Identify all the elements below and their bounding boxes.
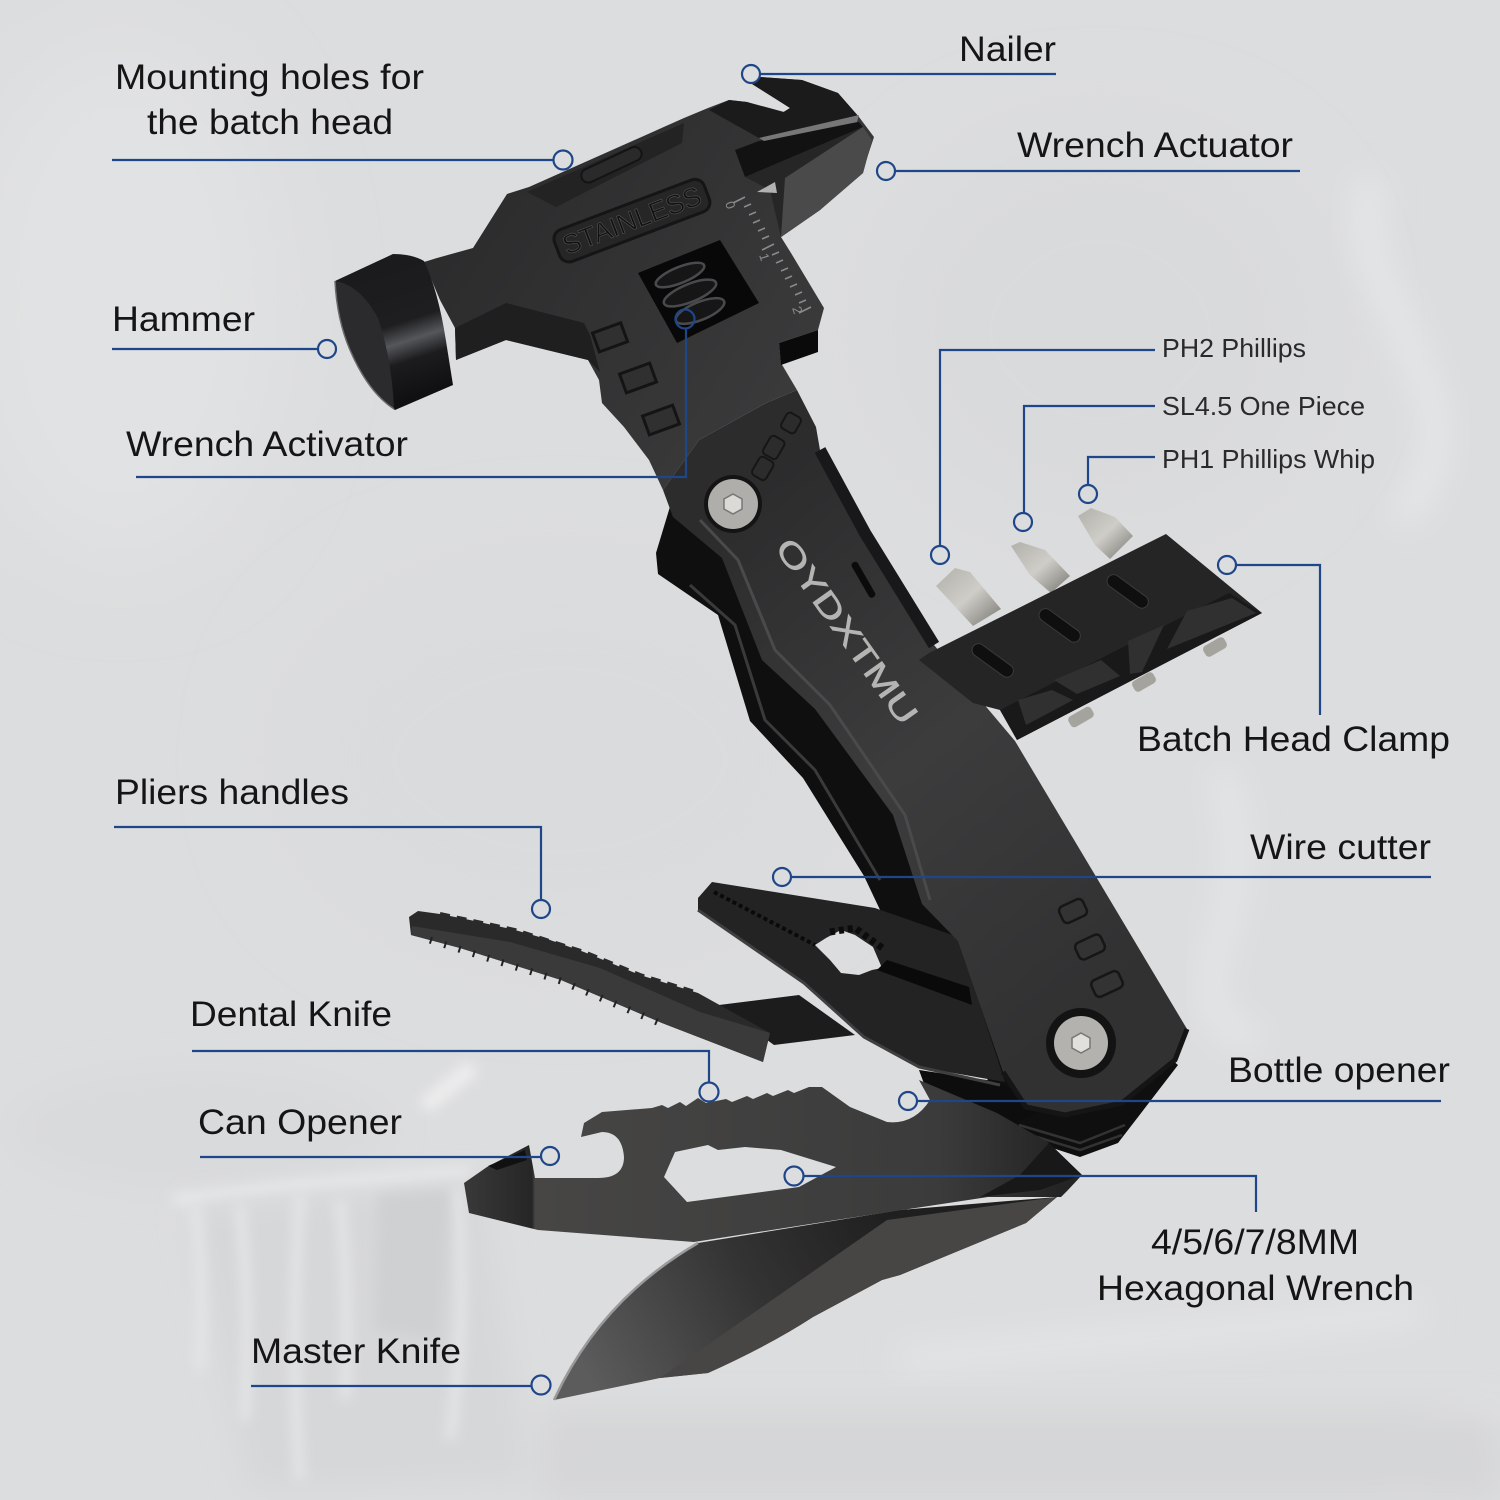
brand name on handle: OYDXTMU	[768, 531, 925, 731]
screw top	[704, 475, 762, 533]
handle top grip dots	[751, 411, 802, 482]
hammer face	[335, 254, 453, 410]
movable jaw	[745, 127, 872, 237]
phillips bit PH1	[1078, 508, 1133, 559]
leader: mounting holes	[112, 58, 572, 170]
leader: pliers handles: Pliers handles	[115, 773, 349, 812]
leader: hexagonal wrench: Hexagonal Wrench	[1097, 1269, 1414, 1308]
leader: PH1 Phillips Whip: PH1 Phillips Whip	[1162, 444, 1375, 474]
multi-blade: can opener, bottle opener, hex wrench	[464, 1080, 1082, 1242]
leader: wire cutter	[773, 828, 1431, 886]
leader: bottle opener: Bottle opener	[1228, 1051, 1450, 1090]
leader: batch head clamp	[1137, 556, 1450, 759]
leader: PH1 Phillips Whip	[1079, 444, 1375, 503]
leader: bottle opener	[899, 1051, 1450, 1110]
phillips bit PH2	[1011, 542, 1070, 593]
flat bit SL4.5	[936, 568, 1001, 626]
leader: wire cutter: Wire cutter	[1250, 828, 1431, 867]
ruler scale	[733, 197, 811, 313]
multitool	[335, 77, 1262, 1400]
master knife blade	[554, 1197, 1057, 1400]
leader: mounting holes: the batch head	[147, 103, 393, 142]
clamp body	[919, 534, 1262, 740]
screw bottom	[1046, 1008, 1116, 1078]
bit clamp with bits	[919, 508, 1262, 740]
leader: master knife: Master Knife	[251, 1332, 461, 1371]
ruler numerals	[722, 199, 806, 316]
top recessed panel	[527, 123, 684, 207]
leader: hexagonal wrench: 4/5/6/7/8MM	[1151, 1223, 1359, 1262]
leader: hexagonal wrench	[784, 1166, 1414, 1308]
leader: nailer	[742, 30, 1056, 83]
stainless plate: STAINLESS	[558, 181, 706, 260]
ruler numerals: 1	[756, 251, 773, 263]
leader: wrench activator: Wrench Activator	[126, 425, 408, 464]
leader: SL4.5 One Piece	[1014, 391, 1365, 531]
leader: PH2 Phillips: PH2 Phillips	[1162, 333, 1306, 363]
main handle	[663, 390, 1187, 1115]
leader: PH2 Phillips	[931, 333, 1306, 564]
clamp side facets	[1018, 598, 1256, 725]
leader: master knife	[251, 1332, 550, 1394]
jaw slot	[779, 330, 818, 365]
ruler numerals: 0	[722, 199, 739, 211]
leader: wrench actuator	[877, 126, 1300, 180]
clamp slots	[969, 572, 1151, 680]
leader: hammer	[112, 300, 336, 358]
leader: wrench activator	[126, 310, 694, 477]
lower bit tips	[1067, 636, 1228, 729]
pliers handle	[409, 911, 855, 1062]
wrench window with worm gear	[638, 240, 759, 343]
leader: wrench actuator: Wrench Actuator	[1017, 126, 1293, 165]
leader: dental knife: Dental Knife	[190, 995, 392, 1034]
back plates of handle	[656, 490, 1178, 1157]
leader: can opener: Can Opener	[198, 1103, 402, 1142]
leader: SL4.5 One Piece: SL4.5 One Piece	[1162, 391, 1365, 421]
ruler numerals: 2	[789, 304, 806, 316]
pliers jaws	[698, 882, 1005, 1085]
leader: batch head clamp: Batch Head Clamp	[1137, 720, 1450, 759]
handle lower grip buttons	[1057, 897, 1124, 998]
leader: dental knife	[190, 995, 718, 1102]
leader: hammer: Hammer	[112, 300, 255, 339]
grip notches	[593, 323, 679, 435]
leader: nailer: Nailer	[959, 30, 1056, 69]
upper jaw	[709, 77, 863, 177]
leader: mounting holes: Mounting holes for	[115, 58, 424, 97]
wrench and hammer head	[424, 77, 874, 490]
handle slot	[850, 561, 876, 599]
leader: pliers handles	[114, 773, 550, 918]
mounting hole slot	[579, 145, 644, 185]
leader: can opener	[198, 1103, 559, 1165]
